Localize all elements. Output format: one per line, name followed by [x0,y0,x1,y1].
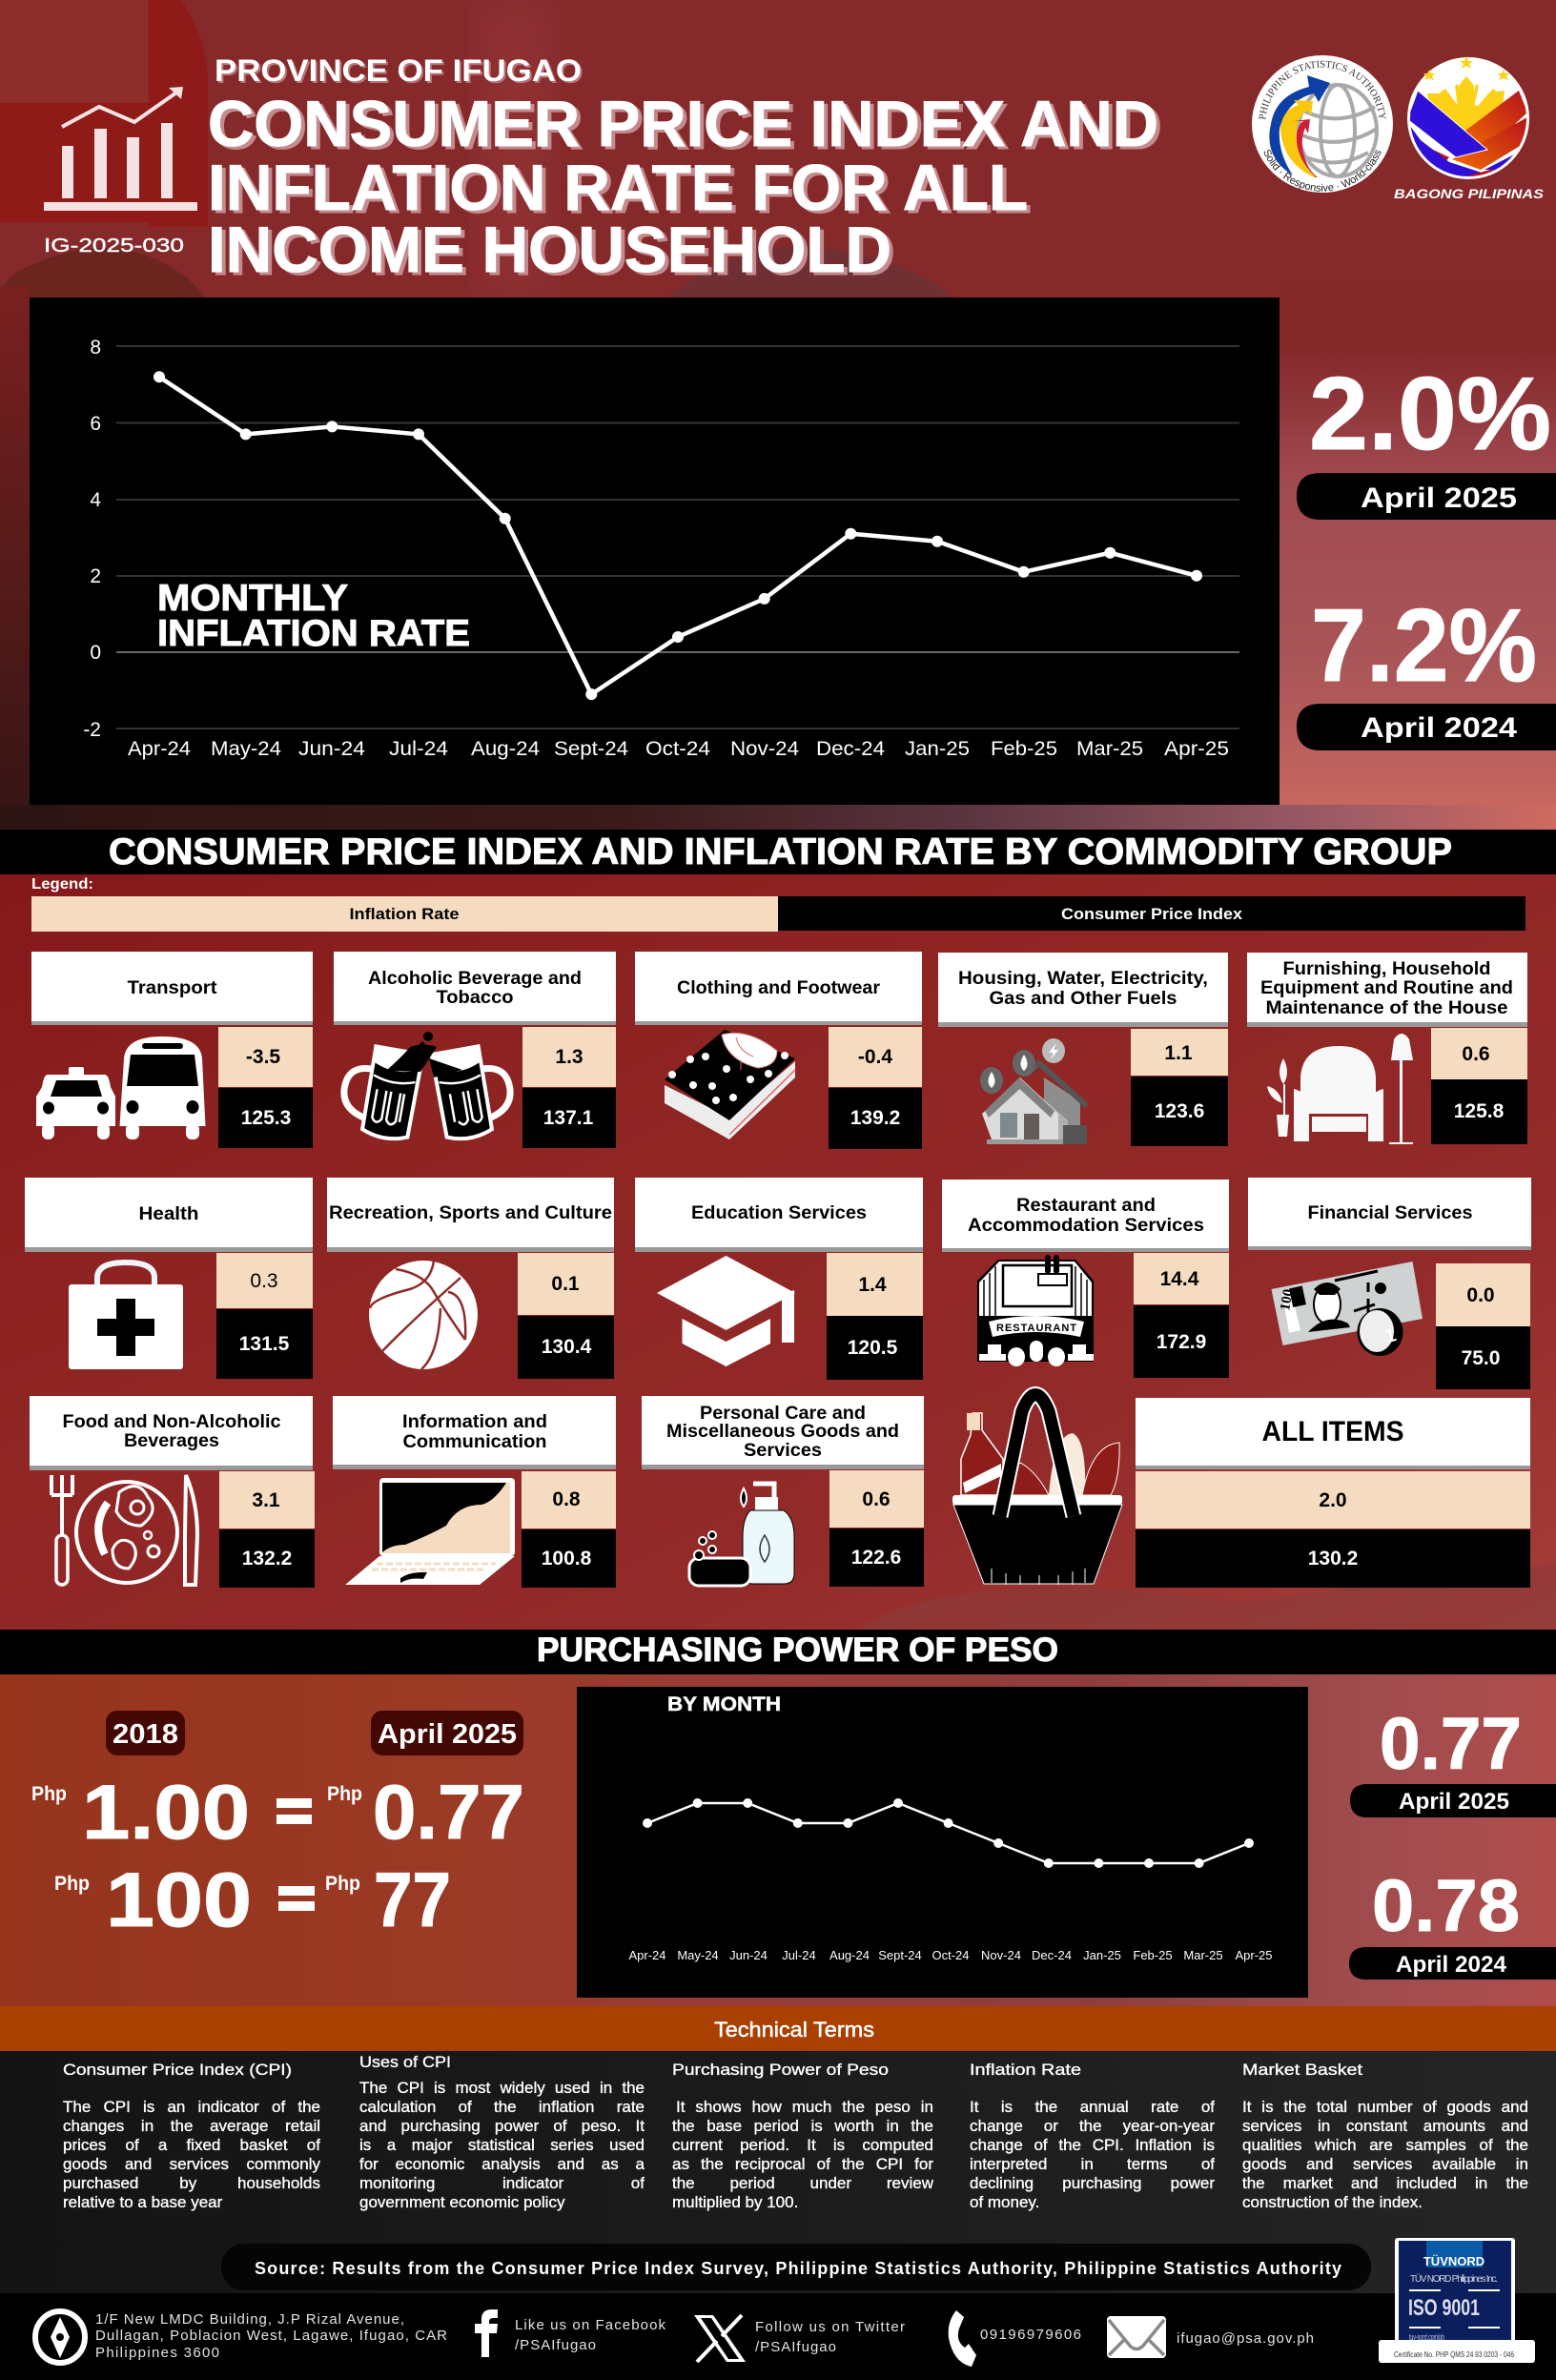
panel: purchasing power by month chart: Dec-24 [1032,1948,1072,1962]
panel: purchasing power equations [31,1711,524,1943]
y axis labels: 6 [90,413,101,435]
footer contacts [35,2238,1535,2367]
x axis labels: Oct-24 [645,738,710,760]
legend: Inflation Rate [349,905,460,923]
text: Consumer Price Index definition: changes in the average retail [63,2117,320,2135]
callout: purchasing power values [1349,1703,1556,1980]
text: Uses of CPI definition: calculation of the inflation rate [359,2098,645,2116]
icon: houses with utilities [980,1038,1087,1144]
card: Clothing and Footwear: Clothing and Footwear [677,978,881,998]
facebook text: Like us on Facebook [515,2317,665,2333]
x axis labels: Apr-24 [128,738,191,760]
panel: purchasing power by month chart: Sept-24 [878,1948,922,1962]
equation: Php 1.00 = Php 0.77: 1.00 [82,1770,250,1856]
section heading: technical terms: Technical Terms [714,2018,874,2041]
card: Education Services [635,1178,923,1380]
card: Financial Services: 75.0 [1462,1347,1500,1369]
text: Uses of CPI definition: The CPI is most widely used in the [359,2079,645,2097]
y axis labels: 2 [90,565,101,587]
card: Furnishing, Household Equipment: 125.8 [1454,1100,1505,1122]
panel: purchasing power by month chart: Jan-25 [1083,1948,1121,1962]
text: Inflation Rate definition [970,2098,1215,2211]
equation: Php 1.00 = Php 0.77 [31,1770,524,1856]
logo: Philippine Statistics Authority [1252,55,1393,193]
x axis labels: Jun-24 [298,738,365,760]
text: Inflation Rate definition: declining purchasing power [970,2174,1215,2192]
badge: April 2025 [371,1711,523,1755]
card: Transport: Transport [128,978,217,998]
text: Uses of CPI definition: and purchasing power of peso. It [359,2117,645,2135]
text: Market Basket definition: It is the total number of goods and [1242,2098,1528,2116]
y axis labels: -2 [83,719,101,741]
card: All Items [1136,1398,1530,1588]
card: Education Services: Education Services [691,1203,867,1223]
text: Consumer Price Index definition: purchased by households [63,2174,320,2192]
text: Consumer Price Index definition: The CPI is an indicator of the [63,2098,320,2116]
line series [154,371,1202,700]
panel: purchasing power by month chart: Mar-25 [1183,1948,1223,1962]
card: Education Services: 120.5 [848,1337,898,1359]
icon: basketball [369,1261,478,1369]
icon: armchair lamp plant [1267,1034,1413,1144]
panel: purchasing power by month chart: Oct-24 [932,1948,970,1962]
term headings: Inflation Rate [970,2061,1081,2079]
badge: April 2025: April 2025 [378,1719,517,1750]
card: Food and Non-Alcoholic Beverages [30,1396,315,1588]
card: Food and Non-Alcoholic Beverages: 3.1 [252,1489,280,1511]
province label: PROVINCE OF IFUGAO [215,53,582,88]
text: Purchasing Power of Peso definition: as the reciprocal of the CPI for [672,2155,933,2173]
address: 1/F New LMDC Building, J.P Rizal Avenue, [95,2311,404,2328]
card: Housing, Water, Electricity, Gas and Other Fuels: 123.6 [1155,1100,1204,1122]
header [44,53,1545,286]
term headings: Market Basket [1242,2061,1362,2079]
card: Restaurant and Accommodation Services: 172.9 [1157,1331,1206,1353]
y axis labels: 8 [90,337,101,359]
callout: purchasing power values: 0.78 [1372,1865,1520,1947]
x axis labels: Nov-24 [730,738,799,760]
text: Inflation Rate definition: interpreted in terms of [970,2155,1215,2173]
icon: graduation cap [657,1256,795,1366]
source bar [221,2244,1371,2290]
card: Restaurant and Accommodation Services: Restaurant and [1016,1196,1156,1216]
card: Alcoholic Beverage and Tobacco: 1.3 [555,1046,584,1068]
card: Furnishing, Household Equipment [1247,953,1527,1144]
card: Personal Care and Miscellaneous: Personal Care and [700,1404,866,1424]
text: Purchasing Power of Peso definition: the period under review [672,2174,933,2192]
card: Recreation, Sports and Culture: Recreation, Sports and Culture [329,1203,612,1223]
icon: taxi and bus [36,1036,206,1139]
icon: plate and cutlery [51,1475,197,1585]
icon: market basket [952,1394,1122,1585]
equation: Php 1.00 = Php 0.77: 0.77 [373,1770,524,1856]
card: All Items: ALL ITEMS [1262,1416,1403,1447]
card: Alcoholic Beverage and Tobacco [334,952,616,1148]
card: Furnishing, Household Equipment: Maintenance of the House [1266,998,1508,1018]
card: All Items: 130.2 [1308,1548,1358,1570]
logo: Philippine Statistics Authority: Solid · Responsive · World-class [1264,150,1381,192]
icon: X [694,2315,746,2362]
address: Dullagan, Poblacion West, Lagawe, Ifugao, CAR [95,2328,447,2344]
term headings: Uses of CPI [359,2053,451,2071]
panel: purchasing power by month chart: BY MONTH [667,1693,781,1715]
icon: email [1107,2316,1166,2358]
equation: Php 100 = Php 77: Php [54,1873,90,1895]
title: CONSUMER PRICE INDEX AND [208,88,1158,160]
card: All Items: 2.0 [1319,1489,1347,1511]
panel: purchasing power by month chart: Jun-24 [729,1948,768,1962]
x axis labels: Jan-25 [905,738,970,760]
badge: ISO 9001 certification [1379,2238,1535,2363]
card: Clothing and Footwear [635,952,922,1149]
card: Transport [31,952,313,1148]
panel: purchasing power by month chart: Nov-24 [981,1948,1021,1962]
card: Food and Non-Alcoholic Beverages: Food and Non-Alcoholic [63,1412,281,1432]
card: Clothing and Footwear: 139.2 [850,1107,900,1129]
equation: Php 100 = Php 77: 100 [106,1857,252,1943]
card: Health: Health [139,1204,198,1224]
term headings: Purchasing Power of Peso [672,2061,889,2079]
card: Restaurant and Accommodation Services: 14.4 [1160,1268,1199,1290]
facebook text: /PSAIfugao [515,2337,596,2353]
card: Recreation, Sports and Culture: 0.1 [551,1273,580,1295]
icon: beer mugs [338,1032,517,1142]
card: Financial Services: Financial Services [1308,1203,1472,1223]
card: Information and Communication: Information and [402,1412,547,1432]
card: Alcoholic Beverage and Tobacco: Alcoholic Beverage and [368,969,582,989]
card: Information and Communication: 0.8 [552,1488,581,1510]
title [208,88,1158,286]
badge: ISO 9001 certification: TÜVNORD [1423,2254,1484,2268]
panel: purchasing power by month chart: Aug-24 [829,1948,870,1962]
title: INFLATION RATE FOR ALL [208,152,1028,224]
callout: inflation rates: April 2025 [1361,482,1517,514]
legend: Consumer Price Index [1061,905,1243,923]
callout: inflation rates: 2.0% [1309,356,1551,472]
icon: restaurant building [977,1255,1094,1366]
logo: Bagong Pilipinas [1394,56,1545,201]
x axis labels: Apr-25 [1164,738,1229,760]
callout: purchasing power values: April 2025 [1399,1789,1509,1815]
icon: facebook [475,2309,498,2357]
text: Purchasing Power of Peso definition: current period. It is computed [672,2136,933,2154]
card: Personal Care and Miscellaneous: Services [744,1441,822,1461]
panel: purchasing power by month chart: Apr-24 [628,1948,666,1962]
card: Personal Care and Miscellaneous: 122.6 [851,1547,901,1569]
icon: restaurant building: RESTAURANT [996,1323,1076,1334]
card: Furnishing, Household Equipment: Furnishing, Household [1283,959,1491,979]
badge: ISO 9001 certification: ISO 9001 [1408,2295,1480,2321]
card: Housing, Water, Electricity, Gas and Other Fuels: Gas and Other Fuels [990,989,1177,1009]
text: Market Basket definition: goods and services available in [1242,2155,1528,2173]
card: Transport: 125.3 [241,1107,291,1129]
phone number: 09196979606 [980,2327,1081,2343]
section heading: technical terms [0,2006,1556,2051]
text: Uses of CPI definition: for economic analysis and as a [359,2155,645,2173]
card: Recreation, Sports and Culture [327,1178,614,1379]
icon: compass [35,2311,85,2363]
text: Inflation Rate definition: It is the annual rate of [970,2098,1215,2116]
card: Transport: -3.5 [246,1046,280,1068]
text: Market Basket definition: services in constant amounts and [1242,2117,1528,2135]
chart title: INFLATION RATE [157,613,470,654]
card: Restaurant and Accommodation Services [942,1180,1229,1378]
logo: Bagong Pilipinas: BAGONG PILIPINAS [1394,186,1545,201]
x axis labels: Feb-25 [991,738,1057,760]
card: Information and Communication: 100.8 [542,1548,592,1570]
report number: IG-2025-030 [44,236,184,256]
card: Housing, Water, Electricity, Gas and Other Fuels: 1.1 [1164,1042,1193,1064]
badge: ISO 9001 certification: tuv-nord.com/ph [1409,2332,1444,2342]
text: Uses of CPI definition: government economic policy [359,2193,564,2211]
text: Uses of CPI definition [359,2079,645,2211]
card: Housing, Water, Electricity, Gas and Other Fuels: Housing, Water, Electricity, [958,969,1208,989]
card: Education Services: 1.4 [858,1274,887,1296]
text: Uses of CPI definition: monitoring indicator of [359,2174,645,2192]
icon: medical kit [69,1262,183,1369]
badge: 2018: 2018 [113,1719,178,1750]
text: Purchasing Power of Peso definition: the base period is worth in the [672,2117,933,2135]
address: Philippines 3600 [95,2345,219,2361]
card: Personal Care and Miscellaneous [642,1396,924,1587]
equation: Php 100 = Php 77: 77 [374,1857,451,1943]
text: Market Basket definition: the market and included in the [1242,2174,1528,2192]
card: Recreation, Sports and Culture: 130.4 [542,1336,592,1358]
callout: inflation rates: April 2024 [1361,712,1517,744]
legend [31,876,1525,932]
card: Financial Services [1248,1178,1531,1389]
panel: monthly inflation line chart [30,298,1280,805]
text: Purchasing Power of Peso definition: multiplied by 100. [672,2193,798,2211]
x axis labels: Dec-24 [816,738,885,760]
x axis labels: May-24 [211,738,281,760]
x axis labels: Jul-24 [389,738,448,760]
panel: purchasing power by month chart: May-24 [677,1948,719,1962]
text: Purchasing Power of Peso definition [672,2098,933,2211]
panel: purchasing power by month chart: Feb-25 [1133,1948,1173,1962]
email address: ifugao@psa.gov.ph [1177,2330,1314,2347]
card: Financial Services: 0.0 [1466,1284,1495,1306]
card: Information and Communication: Communication [402,1432,547,1452]
text: Consumer Price Index definition [63,2098,320,2211]
twitter text: /PSAIfugao [755,2339,836,2355]
card: Furnishing, Household Equipment: Equipment and Routine and [1260,978,1513,998]
term headings [63,2053,1362,2079]
section heading: commodity group: CONSUMER PRICE INDEX AND INFLATION RATE BY COMMODITY GROUP [109,831,1452,872]
callout: inflation rates [1297,356,1556,750]
card: Food and Non-Alcoholic Beverages: 132.2 [242,1548,292,1570]
text: Purchasing Power of Peso definition: It shows how much the peso in [676,2098,933,2116]
chart title: MONTHLY [157,578,348,619]
card: Housing, Water, Electricity, Gas and Other Fuels [938,953,1228,1146]
card: Alcoholic Beverage and Tobacco: 137.1 [543,1107,594,1129]
card: Restaurant and Accommodation Services: Accommodation Services [968,1216,1204,1236]
twitter text [755,2319,905,2355]
y axis labels: 0 [90,642,101,664]
text: Inflation Rate definition: change or the year-on-year [970,2117,1215,2135]
equation: Php 100 = Php 77 [54,1857,451,1943]
card: Personal Care and Miscellaneous: 0.6 [862,1488,891,1510]
y axis labels [83,337,101,741]
section heading: purchasing power [0,1630,1556,1674]
icon: rising bar chart [44,87,197,211]
logo: Philippine Statistics Authority: PHILIPPINE STATISTICS AUTHORITY [1259,61,1386,120]
x axis labels: Aug-24 [471,738,540,760]
card: Health: 131.5 [239,1333,290,1355]
section heading: purchasing power: PURCHASING POWER OF PESO [537,1631,1058,1669]
card: Food and Non-Alcoholic Beverages: Beverages [124,1431,219,1451]
text: Consumer Price Index definition: goods and services commonly [63,2155,320,2173]
equation: Php 1.00 = Php 0.77: Php [31,1783,67,1805]
facebook text [515,2317,665,2353]
icon: peso bill and coin: 100 [1278,1288,1297,1312]
equation: Php 1.00 = Php 0.77: Php [327,1783,362,1805]
icon: folded clothes [665,1030,795,1139]
icon: soap and lotion bottle [689,1484,794,1586]
card: Clothing and Footwear: -0.4 [858,1046,892,1068]
text: Consumer Price Index definition: prices of a fixed basket of [63,2136,320,2154]
text: Market Basket definition: qualities which are samples of the [1242,2136,1528,2154]
icon: peso bill and coin: 1 [1382,1324,1399,1347]
badge: ISO 9001 certification: TÜV NORD Philippines Inc. [1410,2273,1498,2285]
icon: peso bill and coin [1272,1262,1423,1356]
text: Inflation Rate definition: of money. [970,2193,1039,2211]
panel: purchasing power by month chart: Apr-25 [1235,1948,1273,1962]
address [95,2311,447,2361]
equation: Php 100 = Php 77: Php [325,1873,360,1895]
badge: ISO 9001 certification: Certificate No. PHP QMS 24 93 0203 - 046 [1394,2350,1514,2359]
source bar: Source: Results from the Consumer Price Index Survey, Philippine Statistics Authority, Philippine Statistics Authority [255,2259,1341,2278]
callout: purchasing power values: 0.77 [1380,1703,1522,1785]
title: INCOME HOUSEHOLD [208,214,891,286]
callout: purchasing power values: April 2024 [1396,1952,1507,1978]
card: Personal Care and Miscellaneous: Miscellaneous Goods and [666,1422,899,1442]
panel: purchasing power by month chart [577,1687,1308,1998]
x axis labels [128,738,1229,760]
y axis labels: 4 [90,489,101,511]
icon: phone [949,2310,976,2367]
card: Furnishing, Household Equipment: 0.6 [1462,1043,1490,1065]
twitter text: Follow us on Twitter [755,2319,905,2335]
card: Health [25,1178,313,1379]
x axis labels: Mar-25 [1076,738,1143,760]
card: Information and Communication [333,1396,616,1588]
card: Alcoholic Beverage and Tobacco: Tobacco [437,988,513,1008]
icon: laptop [345,1478,515,1585]
panel: purchasing power by month chart: Jul-24 [782,1948,816,1962]
badge: 2018 [106,1711,185,1755]
chart title [157,578,470,654]
legend: Legend: [31,876,93,892]
text: Market Basket definition: construction of the index. [1242,2193,1423,2211]
card: Health: 0.3 [250,1270,278,1292]
text: Inflation Rate definition: change of the CPI. Inflation is [970,2136,1215,2154]
x axis labels: Sept-24 [554,738,628,760]
term headings: Consumer Price Index (CPI) [63,2061,292,2079]
text: Consumer Price Index definition: relative to a base year [63,2193,222,2211]
text: Uses of CPI definition: is a major statistical series used [359,2136,645,2154]
callout: inflation rates: 7.2% [1311,587,1537,704]
text: Market Basket definition [1242,2098,1528,2211]
